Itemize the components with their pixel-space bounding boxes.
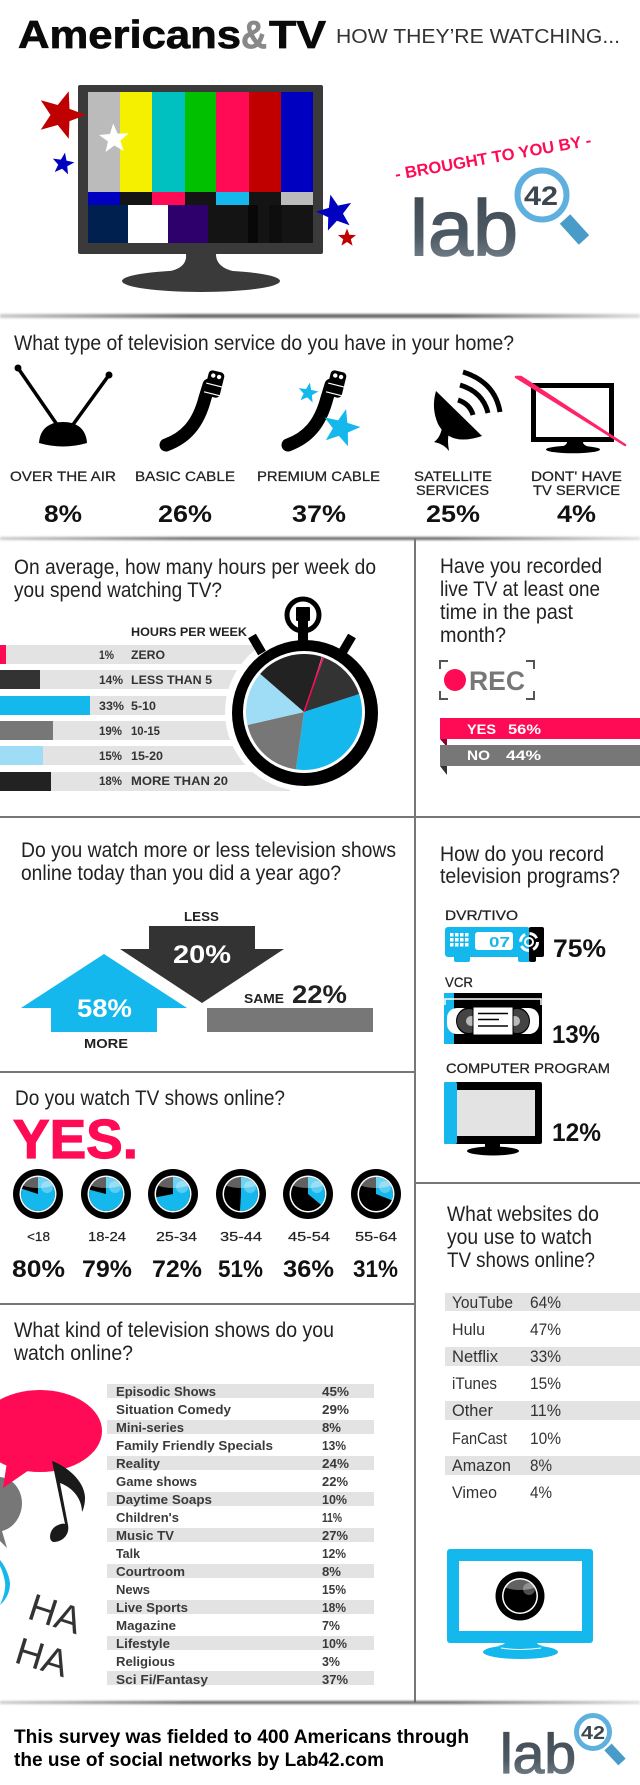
icon: rec: REC [469,666,525,696]
logo: lab42: lab [500,1722,576,1785]
panel: footer [14,1716,622,1785]
table of shows: 10% [322,1636,347,1651]
table of shows: 15% [322,1582,346,1597]
table of websites: Other [452,1402,493,1420]
survey note: This survey was fielded to 400 Americans through [14,1727,469,1748]
service labels [10,468,622,498]
table of shows: 8% [322,1420,341,1435]
table of websites: 10% [530,1430,561,1448]
age labels: 45-54 [288,1230,330,1244]
computer program item: COMPUTER PROGRAM [446,1060,610,1076]
table of shows: 37% [322,1672,348,1687]
heading: live TV at least one [440,578,600,601]
heading: month? [440,624,506,647]
age labels: 18-24 [88,1230,126,1244]
table of shows: Courtroom [116,1564,185,1579]
dvr item: DVR/TIVO [445,907,518,923]
table of shows: Daytime Soaps [116,1492,212,1507]
table of websites: 15% [530,1375,561,1393]
age labels: 25-34 [156,1230,197,1244]
vcr item [444,974,600,1049]
table of websites: Vimeo [452,1484,497,1502]
age labels [27,1230,397,1244]
yes no bars: NO [467,747,490,763]
table of websites: 11% [530,1402,561,1420]
logo: lab42: lab [410,183,518,272]
icon: basic cable [166,369,225,445]
table of websites: 47% [530,1321,561,1339]
service labels: SERVICES [416,482,489,498]
service labels: SATELLITE [414,468,492,484]
brought to you by: - BROUGHT TO YOU BY - [394,132,593,184]
table of shows: 7% [322,1618,340,1633]
bar chart: 18% [99,776,122,788]
arrow: more: MORE [84,1036,128,1051]
table of shows: 18% [322,1600,346,1615]
bar chart: 15% [99,751,122,763]
table of websites: 4% [530,1484,552,1502]
bar: same [207,981,373,1032]
service percentages: 26% [158,501,212,528]
service percentages: 8% [44,501,82,528]
table of shows: 27% [322,1528,348,1543]
table of shows: Children's [116,1510,179,1525]
table of shows: Reality [116,1456,161,1471]
table of shows: 22% [322,1474,348,1489]
icon: premium cable [288,369,364,448]
bar chart: HOURS PER WEEK [131,627,248,639]
title [18,14,326,57]
table of shows: Sci Fi/Fantasy [116,1672,209,1687]
vcr item: VCR [445,974,473,990]
panel: recorded live tv [440,555,640,775]
table of shows: Situation Comedy [116,1402,232,1417]
table of shows: 12% [322,1546,346,1561]
table of shows: 10% [322,1492,347,1507]
yes no bars: 56% [508,721,542,737]
service labels: TV SERVICE [533,482,620,498]
heading: time in the past [440,601,573,624]
table of shows: 29% [322,1402,349,1417]
table of shows: 13% [322,1438,346,1453]
computer program item [444,1060,610,1156]
bar chart: 10-15 [131,726,161,738]
table of shows: 8% [322,1564,341,1579]
table of shows: Music TV [116,1528,174,1543]
icon: blue tv with lens [447,1549,593,1659]
table of shows: Lifestyle [116,1636,170,1651]
bar chart: ZERO [131,650,165,662]
heading [14,556,376,602]
title: & [241,14,267,57]
table of shows: Live Sports [116,1600,188,1615]
dvr item: 07 [489,934,510,951]
table of websites: Amazon [452,1457,511,1475]
logo: lab42 [410,170,584,272]
illustration: bubbles, note and laughter [0,1390,102,1686]
icon: stars [32,84,356,246]
heading: On average, how many hours per week do [14,556,376,579]
age labels: <18 [27,1230,50,1244]
arrow: less: LESS [184,909,219,924]
age percentages: 72% [152,1256,202,1283]
heading: What type of television service do you have in your home? [14,332,514,355]
panel: websites [445,1203,640,1659]
logo: lab42 [500,1716,622,1785]
table of shows: 24% [322,1456,349,1471]
table of shows: Religious [116,1654,175,1669]
panel: header [18,14,620,292]
bar chart: MORE THAN 20 [131,776,228,788]
age percentages: 36% [283,1256,334,1283]
panel: kinds of shows [0,1319,374,1687]
vcr item: 13% [552,1021,600,1049]
table of shows: 11% [322,1510,342,1525]
survey note [14,1727,469,1771]
age percentages: 51% [218,1256,263,1283]
yes no bars [440,718,640,775]
service percentages: 25% [426,501,480,528]
panel: hours per week [0,556,383,791]
icon: rec [440,661,534,699]
stopwatch pie chart [232,599,378,786]
age percentages: 79% [82,1256,132,1283]
heading: Have you recorded [440,555,602,578]
bar chart: 15-20 [131,751,163,763]
bar chart: 1% [99,650,114,662]
title: Americans [18,14,241,57]
subtitle: HOW THEY’RE WATCHING... [336,26,620,48]
heading [447,1203,599,1272]
heading: online today than you did a year ago? [21,862,341,885]
bar chart [0,627,383,791]
table of websites: YouTube [452,1294,513,1312]
service labels: BASIC CABLE [135,468,235,484]
table of shows: 45% [322,1384,349,1399]
table of shows: Family Friendly Specials [116,1438,273,1453]
yes no bars: YES [467,721,496,737]
table of shows: Mini-series [116,1420,184,1435]
heading: watch online? [13,1342,133,1365]
heading: Do you watch TV shows online? [15,1087,285,1110]
age 35-44 lens [216,1169,266,1219]
logo: lab42: 42 [524,181,558,211]
table of websites: 8% [530,1457,552,1475]
bar chart: 5-10 [131,701,156,713]
service labels: PREMIUM CABLE [257,468,380,484]
heading: you spend watching TV? [14,579,222,602]
age 55-64 lens [351,1169,401,1219]
title: TV [269,14,326,57]
heading: How do you record [440,843,604,866]
bar chart: 33% [99,701,124,713]
big yes: YES. [13,1108,138,1170]
panel: how do you record [440,843,620,1156]
age percentages: 80% [12,1256,65,1283]
table of shows: Talk [116,1546,141,1561]
table of shows: Magazine [116,1618,176,1633]
bar: same: 22% [292,981,347,1009]
table of shows: 3% [322,1654,340,1669]
bar chart: LESS THAN 5 [131,675,213,687]
panel: do you watch online [12,1087,401,1283]
heading: television programs? [440,865,620,888]
age 18 lens [13,1169,63,1219]
yes no bars: 44% [506,747,542,763]
illustration: bubbles, note and laughter: HA [23,1587,87,1643]
table of websites: Netflix [452,1348,499,1366]
panel: more or less online [21,839,396,1051]
age 18-24 lens [81,1169,131,1219]
heading: What kind of television shows do you [14,1319,334,1342]
age labels: 55-64 [355,1230,397,1244]
arrow: less [120,909,284,1003]
heading [13,1319,334,1365]
dvr item: 75% [553,935,606,963]
arrow: more: 58% [77,995,132,1023]
bar chart: 19% [99,726,122,738]
table of websites: FanCast [452,1430,507,1448]
dvr item [445,907,606,963]
age 25-34 lens [148,1169,198,1219]
service percentages: 4% [557,501,596,528]
table of websites: 33% [530,1348,561,1366]
table of shows [107,1384,374,1687]
service percentages [44,501,596,528]
table of websites: 64% [530,1294,561,1312]
age labels: 35-44 [220,1230,262,1244]
table of shows: Episodic Shows [116,1384,216,1399]
television with colour bars [78,85,323,292]
bar: same: SAME [244,991,284,1006]
table of websites [445,1293,640,1502]
arrow: more [21,954,187,1051]
age percentages [12,1256,398,1283]
arrow: less: 20% [173,941,231,969]
service labels: OVER THE AIR [10,468,116,484]
age 45-54 lens [283,1169,333,1219]
heading: What websites do [447,1203,599,1226]
icon: satellite dish [434,372,500,451]
illustration: bubbles, note and laughter: HA [10,1630,74,1686]
service labels: DONT' HAVE [531,468,622,484]
heading [440,555,602,647]
panel: television service [10,332,625,528]
bar chart: 14% [99,675,123,687]
age percentages: 31% [353,1256,398,1283]
heading: Do you watch more or less television shows [21,839,396,862]
heading [21,839,396,885]
table of websites: iTunes [452,1375,497,1393]
heading: TV shows online? [447,1249,595,1272]
computer program item: 12% [552,1119,601,1147]
table of websites: Hulu [452,1321,485,1339]
heading: you use to watch [447,1226,592,1249]
table of shows: Game shows [116,1474,197,1489]
icon: antenna [14,364,112,446]
heading [440,843,620,888]
survey note: the use of social networks by Lab42.com [14,1750,384,1771]
table of shows: News [116,1582,150,1597]
service percentages: 37% [292,501,346,528]
logo: lab42: 42 [581,1723,605,1743]
icon: no tv [516,377,625,453]
